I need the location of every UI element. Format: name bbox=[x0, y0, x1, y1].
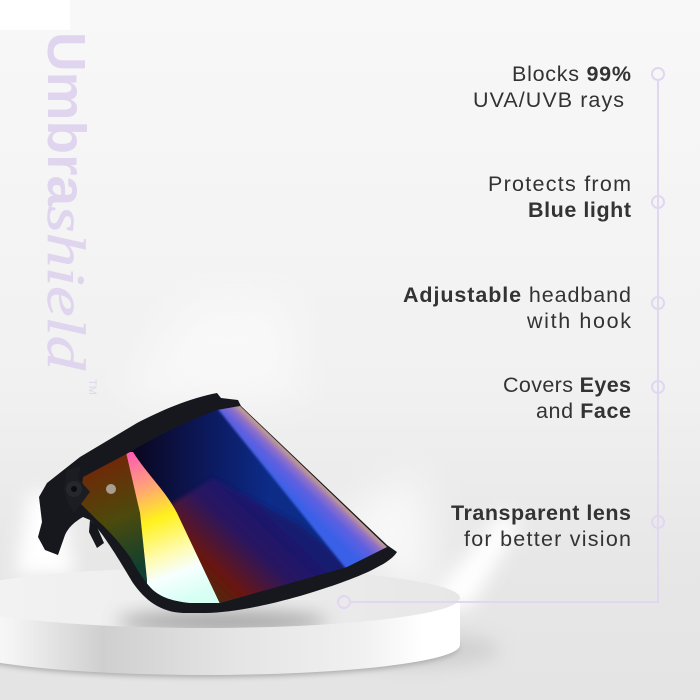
light rays behind visor bbox=[15, 300, 520, 610]
feature: lens: Transparent lens bbox=[451, 501, 631, 525]
feature: coverage: and Face bbox=[536, 399, 631, 423]
lens logo bbox=[106, 484, 116, 494]
feature: blocks rays bbox=[473, 62, 631, 112]
olive left section bbox=[81, 454, 147, 584]
brand name: Umbra bbox=[36, 32, 96, 207]
feature: blue light bbox=[488, 172, 631, 222]
dot bbox=[652, 68, 664, 80]
side pivot bbox=[64, 466, 90, 513]
dot bbox=[652, 381, 664, 393]
brand name bbox=[36, 32, 96, 371]
dot bbox=[338, 596, 350, 608]
connector line bbox=[338, 68, 664, 608]
dot bbox=[652, 297, 664, 309]
blue reflection band bbox=[217, 400, 395, 570]
headband and frame bbox=[38, 393, 397, 613]
feature: headband: with hook bbox=[526, 309, 631, 333]
feature: blocks rays: Blocks 99% bbox=[512, 62, 631, 86]
lower coloured plane bbox=[170, 478, 346, 603]
lens bbox=[81, 406, 387, 603]
brand name: shield bbox=[36, 206, 96, 371]
feature: blue light: Protects from bbox=[488, 172, 631, 196]
feature: coverage bbox=[503, 373, 631, 423]
feature: lens: for better vision bbox=[464, 527, 631, 551]
feature: blocks rays: UVA/UVB rays bbox=[473, 88, 624, 112]
lens navy base bbox=[130, 406, 387, 603]
dot bbox=[652, 196, 664, 208]
feature: headband: Adjustable headband bbox=[403, 283, 631, 307]
bright wedge bbox=[126, 452, 221, 606]
trademark: TM bbox=[86, 379, 98, 395]
feature: lens bbox=[451, 501, 631, 551]
feature: headband bbox=[403, 283, 631, 333]
dot bbox=[652, 516, 664, 528]
feature: blue light: Blue light bbox=[528, 198, 631, 222]
feature: coverage: Covers Eyes bbox=[503, 373, 631, 397]
visor product bbox=[38, 393, 397, 615]
headband clip bbox=[89, 520, 104, 548]
platform bbox=[0, 568, 500, 677]
